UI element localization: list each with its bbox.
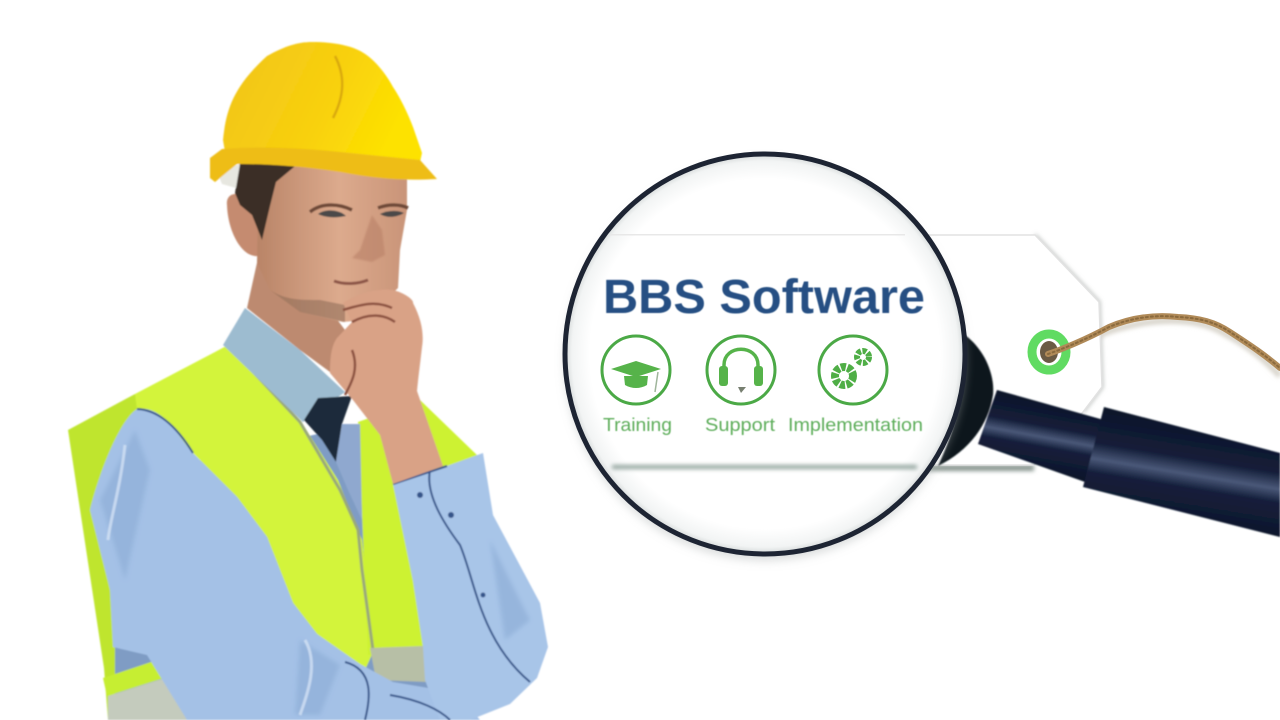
- handle thin section: [978, 390, 1104, 482]
- reflective band left: [108, 678, 195, 720]
- reflective band right: [370, 646, 428, 682]
- vest lime band left: [103, 660, 164, 696]
- price tag with magnifier: [565, 154, 1280, 560]
- tie: [304, 396, 352, 462]
- hand on chin: [330, 290, 443, 484]
- lens rim: [565, 154, 965, 554]
- tag bottom edge in lens: [612, 465, 917, 469]
- right forearm sleeve: [393, 453, 548, 720]
- lens shadow: [565, 160, 965, 560]
- sleeve shading: [100, 430, 530, 715]
- eyes and brows: [310, 205, 408, 217]
- finger lines: [343, 304, 395, 395]
- hard hat: [210, 42, 437, 188]
- tag top edge in lens: [610, 234, 905, 236]
- stubble: [270, 290, 345, 322]
- hat brim: [210, 148, 437, 182]
- string shadow: [1060, 321, 1280, 376]
- handle thick section: [1083, 407, 1280, 537]
- worker figure: [68, 42, 548, 720]
- tag bottom shadow: [610, 465, 1034, 471]
- label: training: Training: [603, 415, 672, 435]
- left arm sleeve: [90, 409, 480, 720]
- sleeve highlights: [108, 445, 311, 715]
- vest zipper line: [228, 345, 373, 650]
- cuff buttons: [417, 492, 486, 598]
- face: [257, 160, 407, 322]
- vest front left panel: [135, 345, 374, 670]
- string: [1048, 316, 1280, 368]
- lens glass: [566, 155, 964, 553]
- shirt torso: [115, 430, 430, 720]
- collar: [223, 308, 345, 422]
- ear: [227, 194, 262, 256]
- mouth: [334, 280, 368, 284]
- vest back panel: [68, 394, 150, 720]
- magnifier handle: [938, 335, 1280, 537]
- tag edge shadow: [1035, 235, 1102, 412]
- label: support: Support: [705, 415, 775, 435]
- tag body: [605, 235, 1102, 465]
- heading: BBS Software: [603, 271, 925, 324]
- shirt placket: [336, 424, 362, 520]
- vest front right panel: [358, 400, 480, 655]
- neck: [247, 240, 345, 372]
- icon: support: [707, 336, 775, 404]
- icon: implementation: [819, 336, 887, 404]
- hat strap: [217, 164, 240, 188]
- handle collar: [938, 335, 993, 466]
- tag eyelet: [1032, 334, 1066, 370]
- sleeve fold lines: [137, 409, 530, 720]
- icon: training: [602, 336, 670, 404]
- hat ridge: [333, 56, 342, 118]
- hair: [235, 160, 300, 240]
- label: implementation: Implementation: [788, 415, 923, 435]
- hat dome: [223, 42, 422, 162]
- nose shadow: [352, 215, 385, 262]
